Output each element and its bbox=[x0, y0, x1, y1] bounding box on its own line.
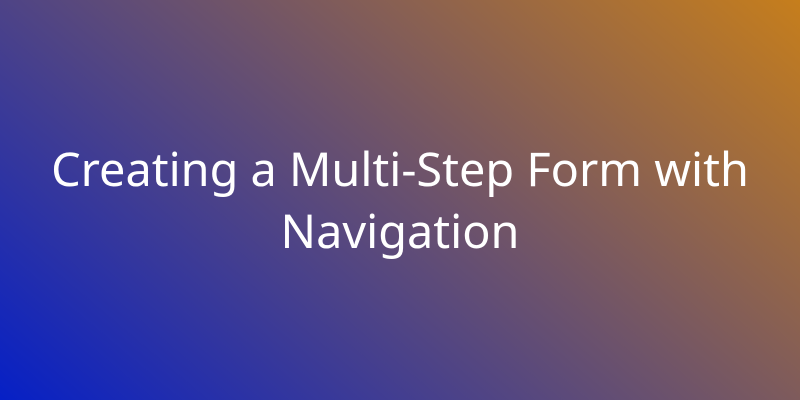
title: Navigation bbox=[281, 198, 519, 262]
title bbox=[51, 136, 749, 262]
title: Creating a Multi-Step Form with bbox=[51, 136, 749, 200]
